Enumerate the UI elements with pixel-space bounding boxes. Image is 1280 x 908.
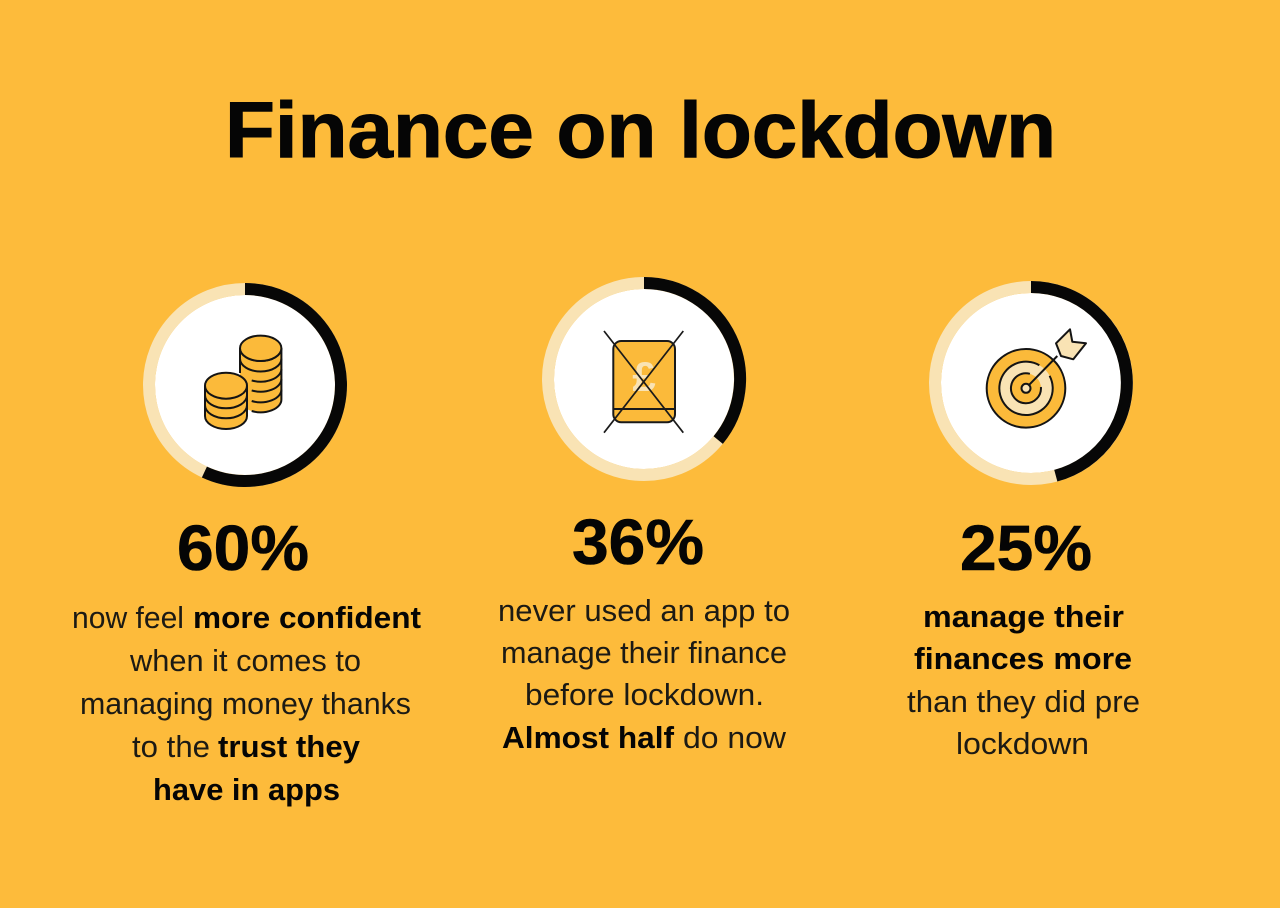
description: 60%: more confident <box>193 601 421 635</box>
description: 60%: now feel <box>72 601 184 635</box>
description: 60%: trust they <box>218 730 360 764</box>
title: Finance on lockdown <box>225 85 1056 174</box>
donut chart: 60% <box>149 289 341 481</box>
description: 25%: manage their <box>923 600 1124 634</box>
description: 60% <box>72 601 421 807</box>
panel: 25 percent <box>907 287 1140 761</box>
stat: 25%: 25% <box>960 512 1092 584</box>
description: 36%: manage their finance <box>501 636 787 670</box>
description: 36%: do now <box>683 721 787 755</box>
description: 60%: have in apps <box>153 773 340 807</box>
donut chart: 25% <box>935 287 1127 479</box>
description: 60%: when it comes to <box>129 644 361 678</box>
panel: 36 percent <box>498 283 790 755</box>
description: 60%: managing money thanks <box>80 687 411 721</box>
description: 36% <box>498 594 790 755</box>
description: 25%: finances more <box>914 642 1132 676</box>
description: 36%: before lockdown. <box>525 678 764 712</box>
donut chart: 36% <box>548 283 740 475</box>
description: 25%: than they did pre <box>907 685 1140 719</box>
panel: 60 percent <box>72 289 421 807</box>
description: 25% <box>907 600 1140 761</box>
icon: coins <box>205 336 281 429</box>
icon: crossed-out pound book: £ <box>632 353 656 400</box>
description: 25%: lockdown <box>956 727 1089 761</box>
stat: 36%: 36% <box>572 506 704 578</box>
icon: target with arrow <box>987 329 1086 428</box>
description: 36%: Almost half <box>502 721 675 755</box>
description: 60%: to the <box>132 730 210 764</box>
icon: crossed-out pound book <box>604 331 683 433</box>
description: 36%: never used an app to <box>498 594 790 628</box>
stat: 60%: 60% <box>177 512 309 584</box>
